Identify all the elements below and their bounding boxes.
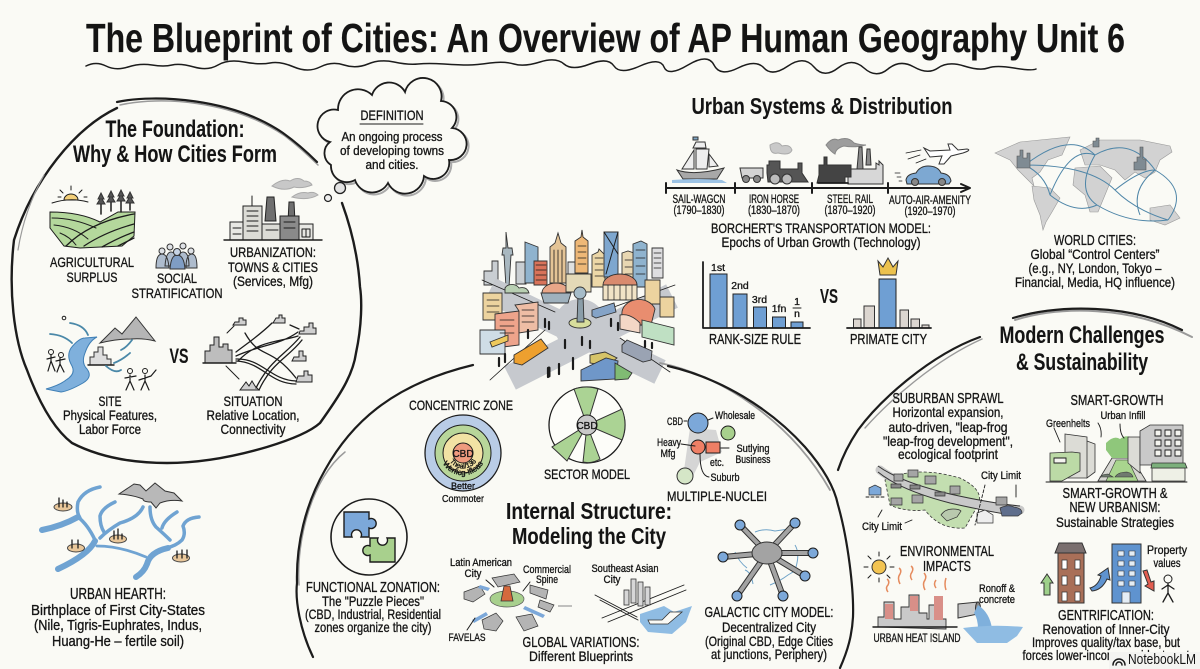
icon: smart growth street	[1046, 410, 1187, 482]
icon: galactic city	[718, 518, 818, 601]
icon: airplane and car	[895, 144, 969, 186]
heading: Why & How Cities Form	[73, 141, 277, 168]
panel outline: modern challenges arcs	[838, 309, 1192, 470]
label: gentrification: GENTRIFICATION:	[1058, 608, 1154, 624]
label: borchert model: Epochs of Urban Growth (Technology)	[722, 234, 920, 250]
icon: suburban sprawl map: City Limit	[862, 521, 902, 533]
panel: modern challenges	[838, 309, 1192, 663]
icon: skyline	[484, 230, 663, 287]
label: social stratification: SOCIAL	[157, 270, 197, 286]
label: site	[63, 393, 157, 437]
label: iron horse	[748, 194, 800, 217]
label: suburban sprawl	[883, 391, 1013, 462]
label: situation: SITUATION	[224, 393, 282, 409]
label: agricultural surplus: SURPLUS	[66, 269, 118, 285]
label: new urbanism: Sustainable Strategies	[1056, 514, 1174, 530]
label: iron horse: IRON HORSE	[749, 194, 799, 206]
label: social stratification	[132, 270, 222, 301]
label: environmental impacts	[900, 544, 994, 575]
icon: suburban sprawl map	[862, 466, 1022, 533]
label: global variations	[522, 634, 640, 664]
heading	[506, 498, 672, 549]
label: southeast asian city	[592, 563, 658, 586]
label: social stratification: STRATIFICATION	[132, 285, 222, 301]
panel: city illustration	[480, 230, 675, 381]
label: functional zonation: zones organize the city)	[314, 619, 432, 635]
heading: Urban Systems & Distribution	[692, 93, 952, 119]
label: gentrification	[1022, 608, 1190, 663]
label: new urbanism: SMART-GROWTH &	[1062, 486, 1168, 502]
label: southeast asian city: Southeast Asian	[592, 563, 658, 575]
label: galactic city model: (Original CBD, Edge Cities	[705, 633, 833, 649]
label: urbanization	[228, 244, 318, 289]
icon: iron horse train	[740, 143, 808, 184]
icon: gentrification	[1041, 543, 1187, 603]
label: southeast asian city: City	[604, 574, 621, 586]
chart: rank-size rule: 1st	[711, 262, 725, 274]
icon: river map	[42, 483, 199, 577]
label: urban hearth: URBAN HEARTH:	[70, 586, 166, 603]
label: situation: Connectivity	[220, 421, 286, 437]
heading: & Sustainability	[1016, 349, 1148, 376]
heading: The Foundation:	[106, 116, 244, 143]
panel: urban systems and distribution	[666, 93, 1180, 348]
label: suburban sprawl: ecological footprint	[898, 446, 998, 462]
label: galactic city model: at junctions, Periphery)	[711, 646, 827, 662]
label: situation	[206, 393, 300, 437]
chart: multiple nuclei: Mfg	[660, 448, 676, 460]
label: borchert model	[711, 220, 931, 250]
label: borchert model: BORCHERT'S TRANSPORTATION MODEL:	[711, 220, 931, 236]
panel outline: internal structure arc	[297, 363, 853, 668]
icon: urbanization factory	[224, 178, 322, 240]
heading: Modeling the City	[512, 523, 666, 549]
label: sail-wagon: (1790–1830)	[674, 205, 725, 217]
icon: sun	[864, 552, 894, 582]
label: global variations: GLOBAL VARIATIONS:	[522, 634, 640, 651]
heading: Internal Structure:	[506, 498, 672, 524]
chart: concentric zone model: Werficg-Ifleas	[444, 460, 483, 478]
icon: runoff pipe	[958, 583, 1023, 643]
icon: roads and domes	[482, 274, 675, 380]
chart: rank-size rule: 1	[794, 296, 800, 308]
chart: multiple nuclei: Sutlying	[736, 443, 770, 455]
chart: concentric zone model: Tneal/136	[450, 458, 476, 469]
label: suburban sprawl: SUBURBAN SPRAWL	[892, 391, 1004, 407]
chart: multiple nuclei: CBD	[667, 416, 683, 428]
label: global variations: Different Blueprints	[529, 648, 633, 664]
label: urban hearth	[31, 586, 205, 650]
label: urbanization: (Services, Mfg)	[233, 273, 313, 289]
chart: concentric zone model: Commoter	[442, 494, 485, 505]
label: agricultural surplus	[50, 254, 134, 285]
label: functional zonation: (CBD, Industrial, Residential	[305, 606, 441, 622]
chart: sector model	[544, 387, 630, 482]
label: auto-air-amenity: AUTO-AIR-AMENITY	[889, 195, 971, 207]
chart: multiple nuclei: Heavy	[657, 437, 681, 449]
chart: multiple nuclei: Suburb	[710, 472, 740, 484]
icon: latin american city	[464, 574, 572, 631]
panel outline: foundation circle	[12, 99, 361, 463]
icon: site	[46, 316, 156, 392]
chart: multiple nuclei: Wholesale	[715, 410, 755, 422]
icon: suburban sprawl map: City Limit	[981, 470, 1021, 482]
icon: urban heat island: URBAN HEAT ISLAND	[874, 631, 961, 645]
callout: definition cloud	[318, 78, 469, 202]
label: latin american city: Commercial	[523, 564, 571, 576]
icon: world map	[995, 137, 1180, 230]
chart: rank-size rule: 2nd	[731, 280, 749, 292]
icon: urban heat island	[873, 566, 961, 645]
label: world cities: (e.g., NY, London, Tokyo –	[1028, 260, 1162, 276]
label: smart-growth: SMART-GROWTH	[1070, 393, 1164, 409]
label: situation: Relative Location,	[206, 407, 300, 423]
label: suburban sprawl: auto-driven, "leap-frog	[888, 419, 1008, 435]
chart: rank-size rule: RANK-SIZE RULE	[709, 331, 801, 348]
label: steel rail: (1870–1920)	[824, 205, 876, 217]
label: latin american city	[448, 557, 571, 644]
icon: smart growth street: Greenhelts	[1046, 418, 1090, 430]
label: functional zonation	[305, 579, 441, 635]
label: functional zonation: The "Puzzle Pieces"	[322, 593, 424, 609]
chart: borchert timeline	[666, 137, 971, 218]
chart: concentric zone model	[409, 397, 513, 505]
icon: steel rail train	[817, 139, 883, 184]
label: vs: VS	[820, 286, 838, 308]
icon: runoff pipe: Ronoff &	[979, 583, 1016, 595]
label: urban hearth: (Nile, Tigris-Euphrates, Indus,	[34, 617, 202, 634]
label: urban hearth: Birthplace of First City-States	[31, 602, 205, 619]
callout: definition cloud: and cities.	[366, 157, 418, 172]
label: suburban sprawl: "leap-frog development",	[883, 433, 1013, 449]
chart: rank-size rule: n	[794, 308, 800, 320]
chart: concentric zone model: CONCENTRIC ZONE	[409, 397, 513, 413]
label: latin american city: Spine	[536, 574, 558, 586]
icon: gentrification: values	[1154, 556, 1180, 570]
panel: internal structure	[295, 362, 854, 669]
axis	[666, 183, 970, 193]
chart: multiple nuclei: etc.	[710, 457, 724, 469]
label: galactic city model: GALACTIC CITY MODEL:	[704, 604, 834, 621]
label: world cities: Global “Control Centers”	[1030, 246, 1160, 262]
label: agricultural surplus: AGRICULTURAL	[50, 254, 134, 270]
icon: runoff pipe: concrete	[979, 594, 1015, 606]
callout: definition cloud: of developing towns	[340, 143, 444, 158]
label: latin american city: City	[464, 568, 482, 580]
label: latin american city: FAVELAS	[448, 632, 486, 644]
label: functional zonation: FUNCTIONAL ZONATION:	[306, 579, 440, 596]
chart: sector model: CBD	[576, 421, 598, 432]
icon: smart growth street: Urban Infill	[1100, 410, 1146, 422]
label: sail-wagon: SAIL-WAGCN	[672, 194, 726, 206]
icon: street buildings and buses	[480, 300, 674, 381]
label: iron horse: (1830–1870)	[748, 205, 800, 217]
chart: multiple nuclei: MULTIPLE-NUCLEI	[667, 488, 767, 504]
icon: southeast asian city	[595, 579, 692, 634]
icon: people group	[156, 243, 197, 269]
callout: definition cloud: DEFINITION	[360, 107, 424, 123]
chart: primate city	[847, 258, 931, 348]
label: environmental impacts: IMPACTS	[923, 559, 971, 575]
label: site: SITE	[98, 393, 122, 409]
chart: rank-size rule: 1fn	[772, 303, 786, 315]
label: environmental impacts: ENVIRONMENTAL	[900, 544, 994, 560]
label: auto-air-amenity: (1920–1970)	[904, 206, 956, 218]
label: new urbanism: NEW URBANISM:	[1070, 500, 1160, 516]
chart: sector model: SECTOR MODEL	[544, 466, 630, 482]
chart: multiple nuclei: Business	[736, 454, 771, 466]
heading	[1000, 322, 1164, 376]
label: world cities	[1015, 233, 1175, 290]
chart: concentric zone model: Better	[451, 481, 475, 491]
label: urbanization: TOWNS & CITIES	[228, 259, 318, 275]
label: steel rail: STEEL RAIL	[827, 194, 873, 206]
chart: rank-size rule	[703, 262, 810, 348]
label: vs: VS	[170, 345, 188, 368]
label: gentrification: Renovation of Inner-City	[1042, 621, 1170, 637]
label: urban hearth: Huang-He – fertile soil)	[52, 633, 184, 650]
chart: primate city: PRIMATE CITY	[850, 331, 927, 348]
panel: urban hearth	[31, 483, 205, 650]
label: world cities: WORLD CITIES:	[1054, 233, 1136, 249]
chart: multiple nuclei	[657, 410, 771, 504]
label: steel rail	[824, 194, 876, 217]
label: sail-wagon	[672, 194, 726, 217]
label: urbanization: URBANIZATION:	[230, 244, 316, 260]
label: galactic city model: Decentralized City	[722, 619, 816, 635]
icon: puzzle pieces	[331, 499, 407, 575]
label: site: Physical Features,	[63, 407, 157, 423]
label: suburban sprawl: Horizontal expansion,	[892, 404, 1004, 420]
panel: the foundation	[12, 99, 361, 463]
chart: concentric zone model: CBD	[452, 449, 474, 460]
icon: agricultural surplus farm	[50, 186, 135, 248]
icon: gentrification: Property	[1147, 543, 1187, 557]
label: new urbanism	[1056, 486, 1174, 530]
label: site: Labor Force	[79, 421, 141, 437]
heading	[73, 116, 277, 168]
icon: situation network	[203, 315, 316, 390]
icon: sailing ship	[672, 137, 727, 183]
chart: rank-size rule: 3rd	[752, 294, 767, 306]
callout: definition cloud: An ongoing process	[342, 129, 443, 144]
label: auto-air-amenity	[889, 195, 971, 218]
label: galactic city model	[704, 604, 834, 662]
label: latin american city: Latin American	[450, 557, 512, 569]
